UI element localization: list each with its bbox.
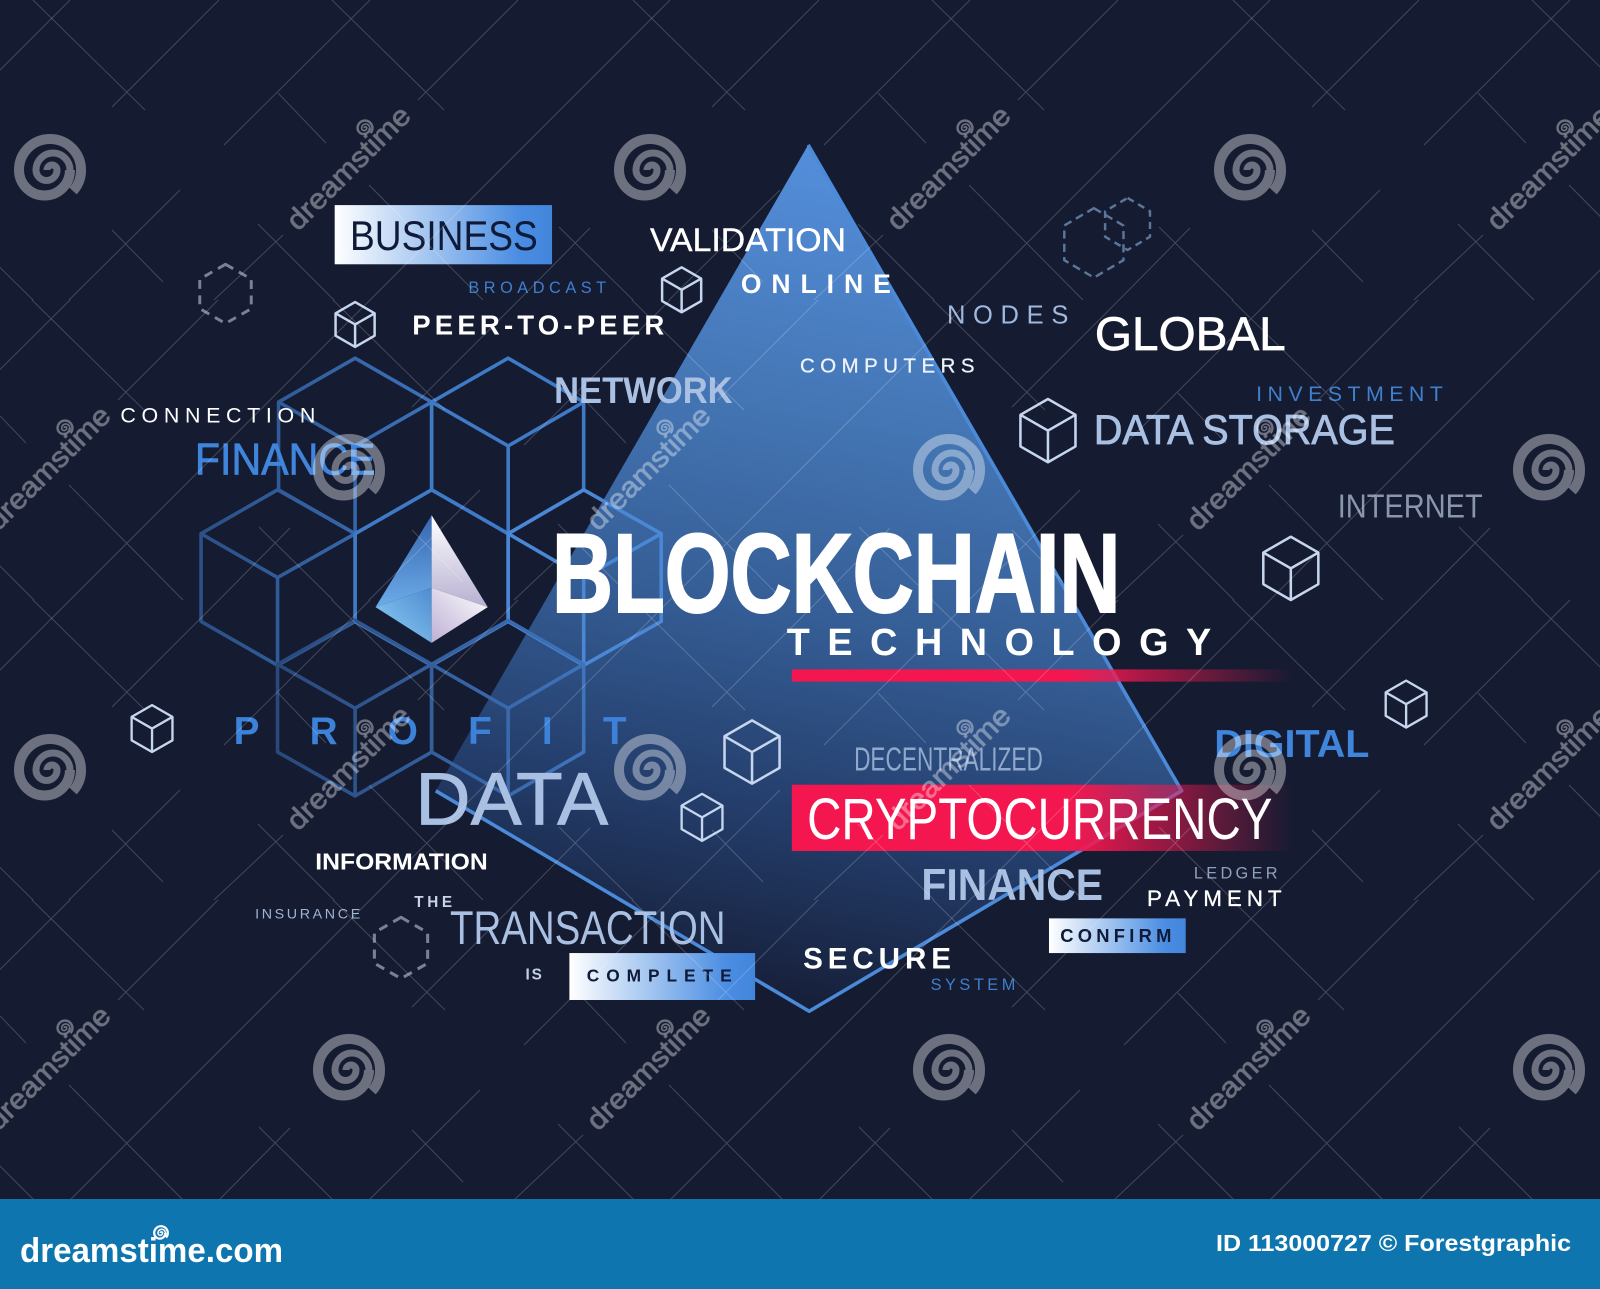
icon: crystal pyramid logo (376, 515, 488, 643)
tag: BUSINESS: BUSINESS (350, 212, 538, 259)
watermark text: dreamstime (280, 100, 418, 237)
word: DECENTRALIZED: DECENTRALIZED (854, 741, 1043, 778)
watermark small spirals beside text (58, 121, 1572, 1034)
icon: cube near validation (662, 267, 701, 312)
main artwork (120, 145, 1483, 1011)
word: PEER-TO-PEER: PEER-TO-PEER (412, 310, 664, 341)
icon: cube large in pyramid (725, 720, 780, 784)
watermark text: dreamstime (880, 100, 1018, 237)
icon: dashed hexagon top left (200, 264, 251, 323)
word: THE: THE (414, 894, 452, 911)
tag: COMPLETE: COMPLETE (587, 966, 732, 986)
icon: cube small in pyramid (682, 794, 722, 841)
word: SYSTEM: SYSTEM (931, 976, 1015, 994)
word: PROFIT: PROFIT (234, 710, 627, 753)
word: BROADCAST: BROADCAST (468, 279, 606, 297)
word: ONLINE: ONLINE (741, 269, 891, 299)
watermark spirals (19, 139, 1580, 1096)
watermark text: dreamstime (1180, 400, 1318, 537)
watermark text: dreamstime (580, 400, 718, 537)
word: DATA: DATA (415, 757, 608, 840)
watermark text: dreamstime (1180, 1000, 1318, 1137)
tag: COMPLETE (569, 953, 755, 1000)
watermark text: dreamstime (280, 700, 418, 837)
word: GLOBAL: GLOBAL (1095, 308, 1286, 360)
word: COMPUTERS: COMPUTERS (800, 355, 974, 377)
word: FINANCE left: FINANCE (195, 433, 376, 484)
word: DIGITAL: DIGITAL (1214, 723, 1369, 766)
word: CONNECTION: CONNECTION (120, 403, 315, 427)
tag: CONFIRM: CONFIRM (1060, 925, 1171, 946)
red underline bar (792, 669, 1294, 682)
word: IS: IS (526, 967, 542, 984)
icon: cube near internet (1263, 537, 1318, 600)
icon: cube near digital (1386, 681, 1427, 728)
isometric hexagon cube network (201, 358, 661, 796)
icon: dashed hexagon bottom left (374, 917, 428, 979)
subtitle: TECHNOLOGY: TECHNOLOGY (787, 621, 1211, 663)
icon: footer logo spiral (154, 1226, 168, 1239)
icon: cube near data storage (1020, 399, 1075, 462)
watermark text: dreamstime (580, 1000, 718, 1137)
word: TRANSACTION: TRANSACTION (450, 902, 726, 954)
icon: cube near profit (132, 705, 172, 752)
word: INFORMATION: INFORMATION (315, 848, 488, 874)
word: LEDGER: LEDGER (1194, 865, 1278, 883)
word: VALIDATION: VALIDATION (650, 221, 846, 258)
word: INTERNET: INTERNET (1338, 488, 1483, 525)
watermark text: dreamstime (880, 700, 1018, 837)
footer bar (0, 1199, 1600, 1289)
footer logo text: dreamstime.com (20, 1232, 283, 1270)
word: SECURE: SECURE (803, 942, 951, 975)
icon: overlapping dashed hexagons top right (1064, 198, 1150, 278)
word: INVESTMENT: INVESTMENT (1256, 382, 1443, 406)
banner: CRYPTOCURRENCY: CRYPTOCURRENCY (807, 787, 1272, 852)
title: BLOCKCHAIN: BLOCKCHAIN (552, 510, 1120, 636)
word: DATA STORAGE: DATA STORAGE (1094, 406, 1395, 453)
icon: cube near peer-to-peer (336, 302, 375, 347)
word: NETWORK: NETWORK (554, 370, 733, 411)
tag: CONFIRM (1049, 918, 1186, 953)
footer image id and credit: ID 113000727 © Forestgraphic (1216, 1230, 1571, 1256)
word: PAYMENT: PAYMENT (1147, 886, 1282, 911)
word: NODES: NODES (947, 301, 1068, 329)
word: INSURANCE: INSURANCE (255, 906, 360, 922)
large pyramid shape (436, 145, 1182, 1011)
word: FINANCE right: FINANCE (921, 859, 1103, 910)
